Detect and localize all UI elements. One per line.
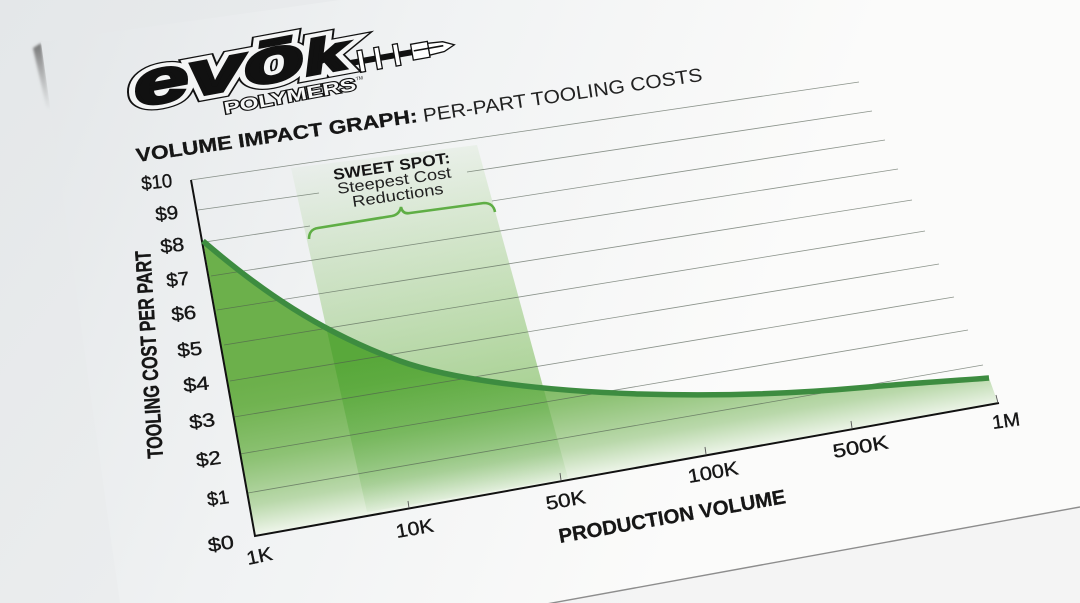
- logo sub-wordmark: TM: [355, 75, 364, 83]
- x axis labels: [245, 409, 1021, 570]
- axes: [191, 180, 999, 536]
- title: PER-PART TOOLING COSTS: [422, 65, 704, 127]
- x axis labels: 500K: [831, 432, 890, 463]
- area under the cost curve: [203, 241, 998, 536]
- paper bottom edge: [530, 507, 1080, 603]
- logo sub-wordmark: [222, 73, 366, 118]
- sweet spot band within area: [328, 332, 568, 512]
- y axis labels: $3: [188, 410, 216, 434]
- sweet spot band above curve: [291, 145, 568, 512]
- y axis labels: $5: [176, 338, 203, 362]
- sweet spot callout: SWEET SPOT:: [332, 150, 451, 184]
- y axis labels: $9: [154, 203, 179, 226]
- sweet spot callout: Steepest Cost: [336, 164, 453, 198]
- y axis labels: $4: [182, 373, 211, 397]
- y axis labels: $2: [195, 448, 222, 472]
- logo wordmark: evōk: [127, 11, 356, 120]
- logo wordmark: evōk: [127, 11, 356, 120]
- y axis labels: [140, 171, 235, 557]
- sweet spot callout: Reductions: [351, 181, 445, 211]
- y axis labels: $10: [140, 171, 173, 195]
- paper shadow: [33, 43, 51, 112]
- logo sub-wordmark: POLYMERS: [222, 75, 357, 118]
- x axis labels: 50K: [544, 487, 588, 515]
- x axis ticks: [408, 395, 998, 508]
- sweet spot callout: [332, 150, 453, 211]
- y axis labels: $0: [206, 532, 235, 557]
- x axis labels: 1K: [245, 544, 275, 570]
- sweet spot brace: [309, 203, 495, 239]
- y axis labels: $1: [206, 487, 230, 511]
- title: VOLUME IMPACT GRAPH:: [135, 106, 419, 167]
- x axis title: PRODUCTION VOLUME: [557, 486, 787, 548]
- logo bolt icon: [335, 34, 456, 76]
- y axis labels: $6: [170, 302, 197, 326]
- x axis labels: 1M: [991, 409, 1021, 434]
- y axis labels: $8: [159, 235, 185, 258]
- y axis title: TOOLING COST PER PART: [130, 250, 168, 459]
- y axis labels: $7: [165, 269, 190, 292]
- title: [135, 65, 704, 167]
- logo wordmark: evōk: [127, 11, 356, 120]
- logo: evok polymers: [127, 11, 456, 120]
- cost curve line: [203, 241, 989, 395]
- logo sub-wordmark: POLYMERS: [222, 75, 357, 118]
- x axis labels: 10K: [394, 516, 436, 543]
- grid lines: [191, 82, 983, 493]
- x axis labels: 100K: [686, 458, 740, 488]
- chart: tooling cost versus production volume: [130, 82, 1021, 570]
